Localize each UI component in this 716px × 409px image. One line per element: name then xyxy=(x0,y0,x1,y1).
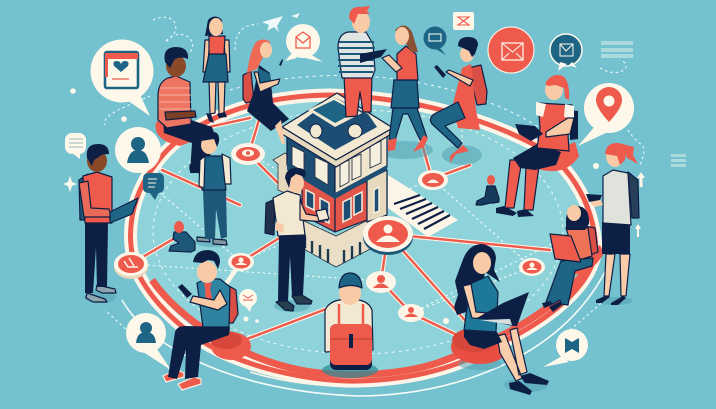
arm xyxy=(79,181,111,217)
head xyxy=(164,47,188,77)
heels xyxy=(450,145,469,163)
head xyxy=(285,168,306,193)
backpack xyxy=(265,199,275,235)
arm xyxy=(446,70,473,86)
legs xyxy=(546,258,593,305)
top xyxy=(209,36,225,54)
person: small seated right xyxy=(476,175,499,205)
speech bubble: small heart xyxy=(239,289,257,312)
lower windows xyxy=(306,187,379,223)
icon: list lines right xyxy=(671,154,686,167)
legs xyxy=(497,328,527,381)
hair xyxy=(395,25,418,52)
legs xyxy=(389,108,427,140)
mansard xyxy=(297,97,377,150)
book xyxy=(110,198,138,223)
torso xyxy=(464,276,498,332)
person: seated with laptop, long hair xyxy=(454,244,549,395)
book xyxy=(515,124,543,141)
arm xyxy=(382,55,402,72)
node: person bottom xyxy=(398,304,424,322)
icon: envelope card xyxy=(453,12,474,30)
person: back with red backpack xyxy=(322,273,378,378)
speech bubble: calendar xyxy=(90,40,154,116)
shoes xyxy=(197,237,227,245)
upper windows xyxy=(292,141,381,187)
skirt xyxy=(203,54,228,82)
speech bubble: location xyxy=(578,83,634,146)
node: person large xyxy=(363,216,413,255)
shoes xyxy=(542,301,562,312)
head xyxy=(193,250,220,283)
pants xyxy=(344,76,372,117)
head xyxy=(605,143,626,167)
dress xyxy=(452,64,480,130)
node: friends xyxy=(418,170,448,190)
head xyxy=(260,42,272,58)
torso xyxy=(566,228,592,261)
heels xyxy=(388,135,428,152)
torso xyxy=(537,103,572,151)
shorts xyxy=(464,330,502,349)
person: seated on phone, lower left xyxy=(163,250,238,390)
book xyxy=(316,209,329,221)
torso xyxy=(325,300,373,352)
head xyxy=(545,75,569,100)
speech bubble: teal mail xyxy=(550,34,582,71)
node: person right xyxy=(519,258,545,276)
legs xyxy=(278,235,306,302)
top xyxy=(397,46,418,80)
hand xyxy=(275,222,284,233)
tie xyxy=(204,283,213,306)
person: standing with book, left xyxy=(79,144,138,302)
top xyxy=(258,68,270,88)
porch xyxy=(273,153,302,200)
speech bubble: person upper xyxy=(115,127,165,173)
legs xyxy=(85,222,108,293)
stripes xyxy=(338,42,375,72)
shoes xyxy=(163,369,201,390)
building xyxy=(273,93,393,267)
torso xyxy=(83,172,112,223)
arm xyxy=(300,200,324,222)
jacket xyxy=(199,154,231,188)
phone xyxy=(279,59,283,66)
shoes xyxy=(496,206,534,217)
stairs xyxy=(388,175,458,237)
legs xyxy=(209,80,225,114)
person: seated striped sweater xyxy=(158,47,215,174)
person: top centre striped xyxy=(338,6,387,117)
trousers xyxy=(168,326,230,379)
shorts xyxy=(602,222,630,254)
person: standing teal top xyxy=(197,132,231,245)
speech bubble: bookmark xyxy=(543,329,588,367)
head xyxy=(201,132,219,154)
sweater stripes xyxy=(159,88,191,109)
person: standing woman with skirt xyxy=(203,16,230,123)
torso xyxy=(273,191,305,236)
person: standing centre with backpack xyxy=(265,168,329,311)
torso xyxy=(338,32,375,78)
shoes xyxy=(509,373,549,395)
leg xyxy=(275,120,285,144)
shoes xyxy=(276,295,312,311)
upper left wall xyxy=(287,135,335,195)
torso xyxy=(158,76,191,128)
torso xyxy=(202,156,226,190)
person: phone woman red hair xyxy=(243,40,289,144)
shoes xyxy=(596,295,626,305)
network links xyxy=(131,110,550,345)
hair back xyxy=(454,244,500,315)
head xyxy=(566,205,589,230)
icon: plane xyxy=(262,13,300,32)
speech bubble: teal chat xyxy=(424,26,446,55)
legs xyxy=(203,190,227,239)
arms xyxy=(203,40,230,72)
person: seated with book xyxy=(496,75,578,217)
head xyxy=(349,6,370,33)
icon: red mail circle xyxy=(488,27,534,73)
lower right wall xyxy=(335,181,367,232)
head xyxy=(473,252,491,274)
roof dormers xyxy=(310,124,362,138)
person: standing ponytail xyxy=(586,143,639,305)
phone xyxy=(178,284,192,298)
person: woman brown hair walking xyxy=(382,25,428,152)
decorative dots and sparkle xyxy=(63,88,645,324)
backpack xyxy=(570,110,578,140)
speech bubble: teal note xyxy=(143,173,164,200)
backpack xyxy=(468,65,487,105)
node: target xyxy=(231,143,265,165)
dotted links xyxy=(104,17,644,370)
band xyxy=(287,163,387,199)
trousers xyxy=(163,119,215,173)
thighs xyxy=(513,144,561,170)
arm xyxy=(165,111,196,120)
lower left wall xyxy=(302,176,335,232)
tower side xyxy=(367,170,387,222)
arm xyxy=(463,284,501,320)
heels xyxy=(206,112,227,123)
leg xyxy=(430,102,465,148)
phone xyxy=(434,65,446,78)
upper right wall xyxy=(335,135,387,195)
roof cornice xyxy=(282,93,393,160)
laptop xyxy=(477,292,529,326)
book xyxy=(586,194,602,202)
network rings xyxy=(122,76,606,396)
foot shadows xyxy=(84,141,633,392)
torso xyxy=(197,279,230,327)
skirt xyxy=(391,80,419,108)
person: on phone red dress xyxy=(430,37,487,163)
node: person small left xyxy=(228,253,254,271)
backpack xyxy=(243,71,254,103)
backpack xyxy=(628,172,639,218)
ponytail xyxy=(622,144,638,164)
hair xyxy=(247,40,270,73)
person: small seated left xyxy=(169,221,195,252)
node: person lower xyxy=(366,271,396,293)
head xyxy=(339,273,362,305)
person: seated with red laptop xyxy=(542,205,598,312)
roof top xyxy=(308,97,362,127)
arm xyxy=(190,290,227,310)
icon: list lines top right xyxy=(601,41,633,58)
book xyxy=(360,49,387,63)
head xyxy=(458,37,478,62)
laptop xyxy=(550,234,581,262)
head xyxy=(205,16,223,36)
dress xyxy=(247,65,289,131)
arm xyxy=(254,72,280,92)
backpack xyxy=(79,174,90,220)
lower legs xyxy=(505,160,539,210)
torso xyxy=(603,170,631,225)
legs xyxy=(604,254,630,296)
shadow xyxy=(322,362,378,378)
speech bubble: mail top xyxy=(285,24,323,62)
speech bubble: person lower xyxy=(126,313,171,370)
sleeves xyxy=(536,102,574,118)
head xyxy=(395,27,409,45)
node: book xyxy=(114,252,148,279)
backpack xyxy=(224,283,238,323)
backpack xyxy=(585,226,598,255)
roof edge xyxy=(282,127,393,167)
head xyxy=(87,144,109,172)
colonnade base xyxy=(302,218,372,267)
arm xyxy=(546,118,574,137)
shoes xyxy=(86,285,116,302)
backpack xyxy=(330,304,372,370)
arm xyxy=(590,195,603,207)
network nodes xyxy=(114,143,545,322)
seat pads xyxy=(156,116,604,364)
speech bubble: notes xyxy=(65,133,86,159)
shoe xyxy=(190,164,208,174)
